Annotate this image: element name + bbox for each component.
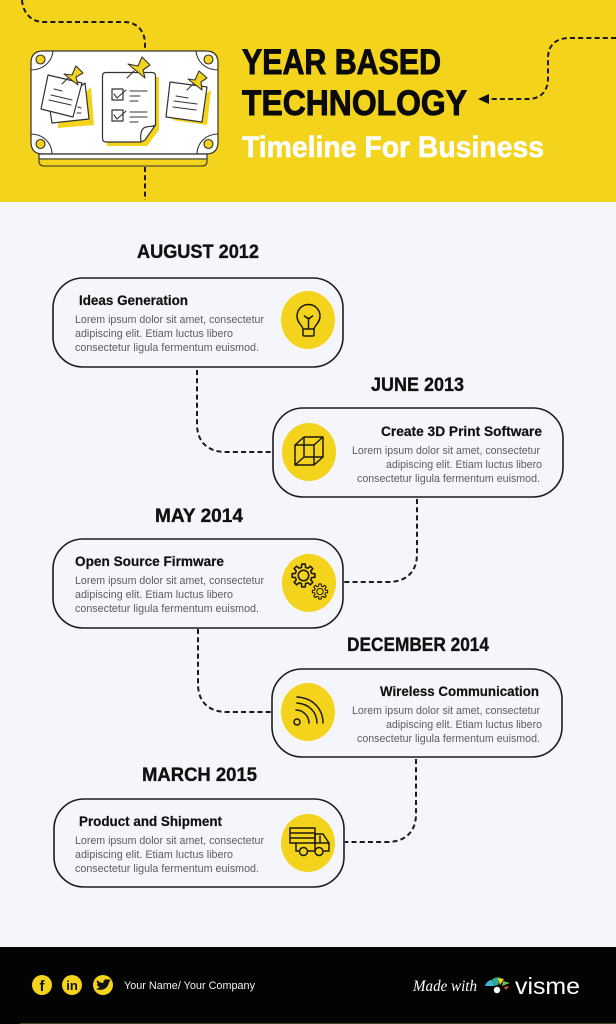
icon: twitter xyxy=(93,975,113,995)
card text xyxy=(75,314,264,354)
icon: gears xyxy=(282,554,336,612)
panel: June 2013 xyxy=(273,375,563,497)
card text: adipiscing elit. Etiam luctus libero xyxy=(75,849,233,861)
icon: 3D cube xyxy=(282,423,336,481)
visme wordmark: visme xyxy=(515,973,580,999)
company name: Your Name/ Your Company xyxy=(124,980,255,992)
card title: Wireless Communication xyxy=(380,684,539,699)
date heading: MARCH 2015 xyxy=(142,765,257,786)
icon: wireless signal xyxy=(281,683,335,741)
header panel xyxy=(0,0,616,202)
card text: consectetur ligula fermentum euismod. xyxy=(357,733,540,745)
dashed connector: card 3 to card 4 xyxy=(198,629,272,712)
footer panel xyxy=(0,947,616,1024)
icon: facebook xyxy=(32,975,52,995)
icon: delivery truck xyxy=(281,814,335,872)
card outline xyxy=(53,278,343,367)
card outline xyxy=(272,669,562,757)
right note xyxy=(166,71,211,125)
card text: Lorem ipsum dolor sit amet, consectetur xyxy=(352,445,540,457)
card text: adipiscing elit. Etiam luctus libero xyxy=(75,328,233,340)
icon: facebook: f xyxy=(40,978,46,995)
card text: adipiscing elit. Etiam luctus libero xyxy=(386,459,542,471)
card text: consectetur ligula fermentum euismod. xyxy=(75,603,259,615)
dashed connector: card 4 to card 5 xyxy=(345,759,416,842)
date heading: MAY 2014 xyxy=(155,506,243,527)
icon: light bulb xyxy=(281,291,335,349)
card title: Create 3D Print Software xyxy=(381,424,542,439)
made with label: Made with xyxy=(412,978,477,995)
card title: Open Source Firmware xyxy=(75,554,224,569)
center checklist document xyxy=(102,57,159,146)
panel: March 2015 xyxy=(54,765,344,887)
icon: linkedin xyxy=(62,975,82,995)
card text: Lorem ipsum dolor sit amet, consectetur xyxy=(75,575,264,587)
icon: linkedin: in xyxy=(66,978,78,993)
card text: adipiscing elit. Etiam luctus libero xyxy=(75,589,233,601)
card text: consectetur ligula fermentum euismod. xyxy=(357,473,540,485)
icon: notice board with pinned notes xyxy=(31,51,218,166)
date heading: AUGUST 2012 xyxy=(137,242,259,263)
dashed connector: card 1 to card 2 xyxy=(197,370,273,452)
panel: May 2014 xyxy=(53,506,343,628)
card text: consectetur ligula fermentum euismod. xyxy=(75,342,259,354)
title: TECHNOLOGY xyxy=(242,84,467,123)
card title: Product and Shipment xyxy=(79,814,222,829)
dashed connector: top left into board xyxy=(22,0,145,51)
left notes xyxy=(41,66,94,128)
card text: consectetur ligula fermentum euismod. xyxy=(75,863,259,875)
card text: Lorem ipsum dolor sit amet, consectetur xyxy=(352,705,540,717)
card text xyxy=(352,445,542,485)
icon: visme logo xyxy=(485,977,510,993)
card text xyxy=(75,575,264,615)
card text: Lorem ipsum dolor sit amet, consectetur xyxy=(75,835,264,847)
date heading: JUNE 2013 xyxy=(371,375,464,396)
dashed connector: card 2 to card 3 xyxy=(344,499,417,582)
card outline xyxy=(273,408,563,497)
card outline xyxy=(53,539,343,628)
card text xyxy=(352,705,542,745)
card text: adipiscing elit. Etiam luctus libero xyxy=(386,719,542,731)
title xyxy=(242,43,467,123)
panel: August 2012 xyxy=(53,242,343,367)
dashed connector: below board xyxy=(144,167,146,200)
title: YEAR BASED xyxy=(242,43,441,82)
card text: Lorem ipsum dolor sit amet, consectetur xyxy=(75,314,264,326)
panel: December 2014 xyxy=(272,635,562,757)
card outline xyxy=(54,799,344,887)
card text xyxy=(75,835,264,875)
arrow: dashed connector pointing to title xyxy=(478,38,616,104)
card title: Ideas Generation xyxy=(79,293,188,308)
date heading: DECEMBER 2014 xyxy=(347,635,489,656)
subtitle: Timeline For Business xyxy=(242,131,544,164)
